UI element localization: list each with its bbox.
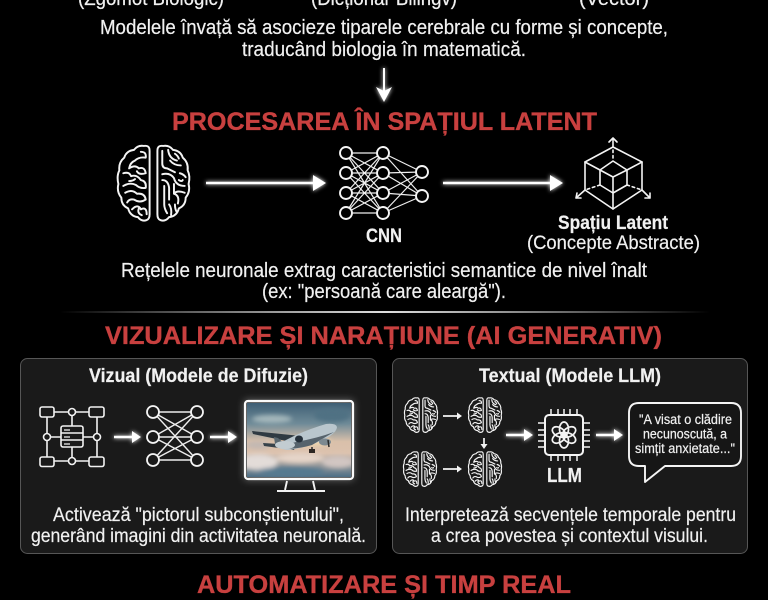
text block: textual description bbox=[405, 505, 736, 547]
icon group: four brains with arrows bbox=[403, 398, 502, 486]
text block: latent description: (ex: "persoană care aleargă"). bbox=[262, 280, 506, 303]
speech bubble: necunoscută, a bbox=[643, 426, 727, 442]
speech bubble: simțit anxietate..." bbox=[635, 441, 735, 456]
text block: latent description bbox=[121, 259, 647, 303]
arrow: CNN to latent space bbox=[443, 175, 563, 191]
panel: textual LLM models bbox=[392, 358, 748, 554]
heading: latent space: PROCESAREA ÎN SPAȚIUL LATENT bbox=[172, 106, 597, 136]
arrow: brains to LLM bbox=[506, 429, 533, 441]
text block: intro description: traducând biologia în matematică. bbox=[242, 38, 526, 61]
icon: data pipeline diagram bbox=[40, 407, 104, 466]
icon: small neural network bbox=[147, 406, 203, 466]
panel: visual diffusion models bbox=[20, 358, 376, 554]
text block: textual description: Interpretează secvențele temporale pentru bbox=[405, 505, 736, 526]
icon: LLM chip bbox=[538, 409, 590, 461]
label: latent space bbox=[527, 213, 700, 254]
text block: textual description: a crea povestea și contextul visului. bbox=[431, 526, 708, 547]
top labels (cropped row) bbox=[78, 0, 649, 10]
speech bubble: "A visat o clădire bbox=[639, 412, 732, 427]
text block: visual description bbox=[31, 505, 366, 547]
arrow: LLM to speech bubble bbox=[596, 429, 623, 441]
icon: brain bbox=[118, 146, 189, 221]
heading: visualization and narration: VIZUALIZARE ȘI NARAȚIUNE (AI GENERATIV) bbox=[105, 322, 662, 350]
icon: latent space cube bbox=[576, 138, 650, 209]
text block: visual description: Activează "pictorul subconștientului", bbox=[53, 505, 344, 526]
arrow: pipeline to network bbox=[114, 431, 141, 443]
arrow: down to latent section bbox=[376, 68, 392, 102]
arrow: brain to CNN bbox=[206, 175, 326, 191]
text block: visual description: generând imagini din activitatea neuronală. bbox=[31, 526, 366, 547]
heading: automation and real time: AUTOMATIZARE ȘI TIMP REAL bbox=[197, 571, 571, 599]
icon: CNN neural network bbox=[340, 147, 428, 219]
arrow: network to monitor bbox=[210, 431, 237, 443]
label: CNN: CNN bbox=[366, 226, 402, 247]
label: LLM: LLM bbox=[547, 465, 582, 487]
text block: latent description: Rețelele neuronale extrag caracteristici semantice de nivel înalt bbox=[121, 259, 647, 282]
text block: intro description bbox=[100, 16, 668, 61]
panel title: textual: Textual (Modele LLM) bbox=[479, 366, 661, 387]
icon: monitor with airplane image bbox=[238, 400, 354, 491]
speech bubble bbox=[629, 403, 741, 482]
panel title: visual: Vizual (Modele de Difuzie) bbox=[89, 366, 308, 387]
label: latent space: Spațiu Latent bbox=[558, 213, 669, 234]
label: latent space: (Concepte Abstracte) bbox=[527, 232, 700, 254]
text block: intro description: Modelele învață să asocieze tiparele cerebrale cu forme și concepte, bbox=[100, 16, 668, 39]
